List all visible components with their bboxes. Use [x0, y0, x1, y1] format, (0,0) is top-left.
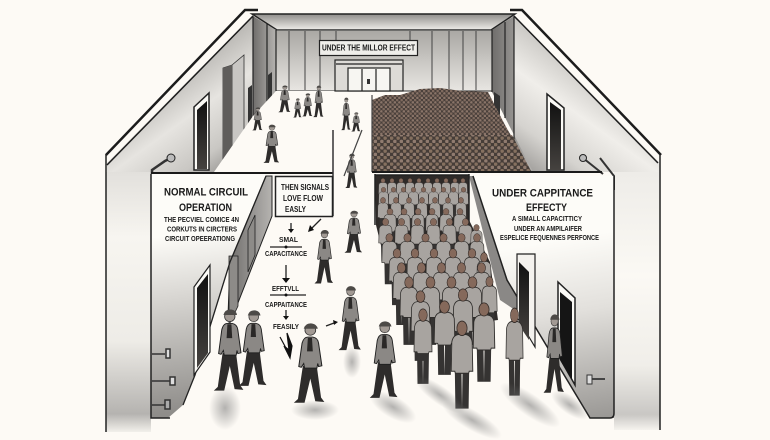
icon: right pipes — [583, 158, 614, 190]
centre divider line — [344, 95, 372, 176]
icon: upper left door — [194, 93, 209, 170]
panel: normal circuit operation — [151, 173, 333, 418]
panel: normal circuit operation: CIRCUIT OPEERATIONG — [165, 234, 235, 243]
icon: wall plugs — [152, 349, 175, 409]
panel: under capacitance effect: EFFECTY — [526, 202, 568, 214]
panel: under capacitance effect — [372, 172, 614, 418]
far walkers — [252, 85, 360, 188]
panel: under capacitance effect: ESPELICE FEQUENNES PERFONCE — [500, 233, 599, 242]
icon: left door — [194, 265, 210, 375]
panel: normal circuit operation: CORKUTS IN CIRCTERS — [167, 224, 237, 234]
icon: right wall plug — [587, 375, 605, 384]
icon: left pipe — [152, 158, 171, 175]
icon: upper right door — [547, 94, 564, 170]
icon: entrance doors — [335, 60, 403, 91]
panel: left outer wall — [106, 10, 258, 432]
panel: under capacitance effect: UNDER AN AMPILAIFER — [514, 224, 582, 233]
icon: right doors — [517, 254, 575, 385]
flow notes and arrows — [265, 219, 338, 358]
sign: then signals: LOVE FLOW — [283, 194, 323, 203]
sign: under the millor effect: UNDER THE MILLOR EFFECT — [322, 44, 415, 52]
flow notes and arrows: CAPACITANCE — [265, 251, 307, 258]
heading: under capacitance: UNDER CAPPITANCE — [492, 188, 593, 200]
panel: normal circuit operation: THE PECVIEL COMICE 4N — [164, 215, 239, 224]
sign: then signals: THEN SIGNALS — [281, 183, 330, 192]
panel: under capacitance effect: A SIMALL CAPACITTICY — [512, 214, 582, 223]
floor shadows — [209, 346, 593, 440]
flow notes and arrows: FEASILY — [273, 324, 299, 331]
heading: normal circuit operation: NORMAL CIRCUIL — [164, 186, 248, 198]
panel: left corridor wall — [248, 16, 276, 130]
panel: right outer wall — [510, 10, 661, 430]
sign: under the millor effect — [320, 40, 418, 56]
sign: then signals — [276, 130, 333, 216]
panel: ceiling — [252, 14, 515, 30]
far crowd — [372, 88, 531, 171]
flow notes and arrows: CAPPAITANCE — [265, 302, 307, 309]
panel: back wall — [276, 30, 492, 91]
arrow: large down — [280, 333, 292, 358]
flow notes and arrows: SMAL — [279, 237, 299, 244]
floor — [214, 91, 372, 172]
near walkers — [214, 211, 564, 403]
flow notes and arrows: EFFTVLL — [272, 286, 300, 293]
panel: normal circuit operation: OPERATION — [179, 202, 232, 214]
sign: then signals: EASLY — [285, 205, 307, 214]
near crowd — [375, 174, 523, 409]
panel: right corridor wall — [492, 16, 532, 170]
